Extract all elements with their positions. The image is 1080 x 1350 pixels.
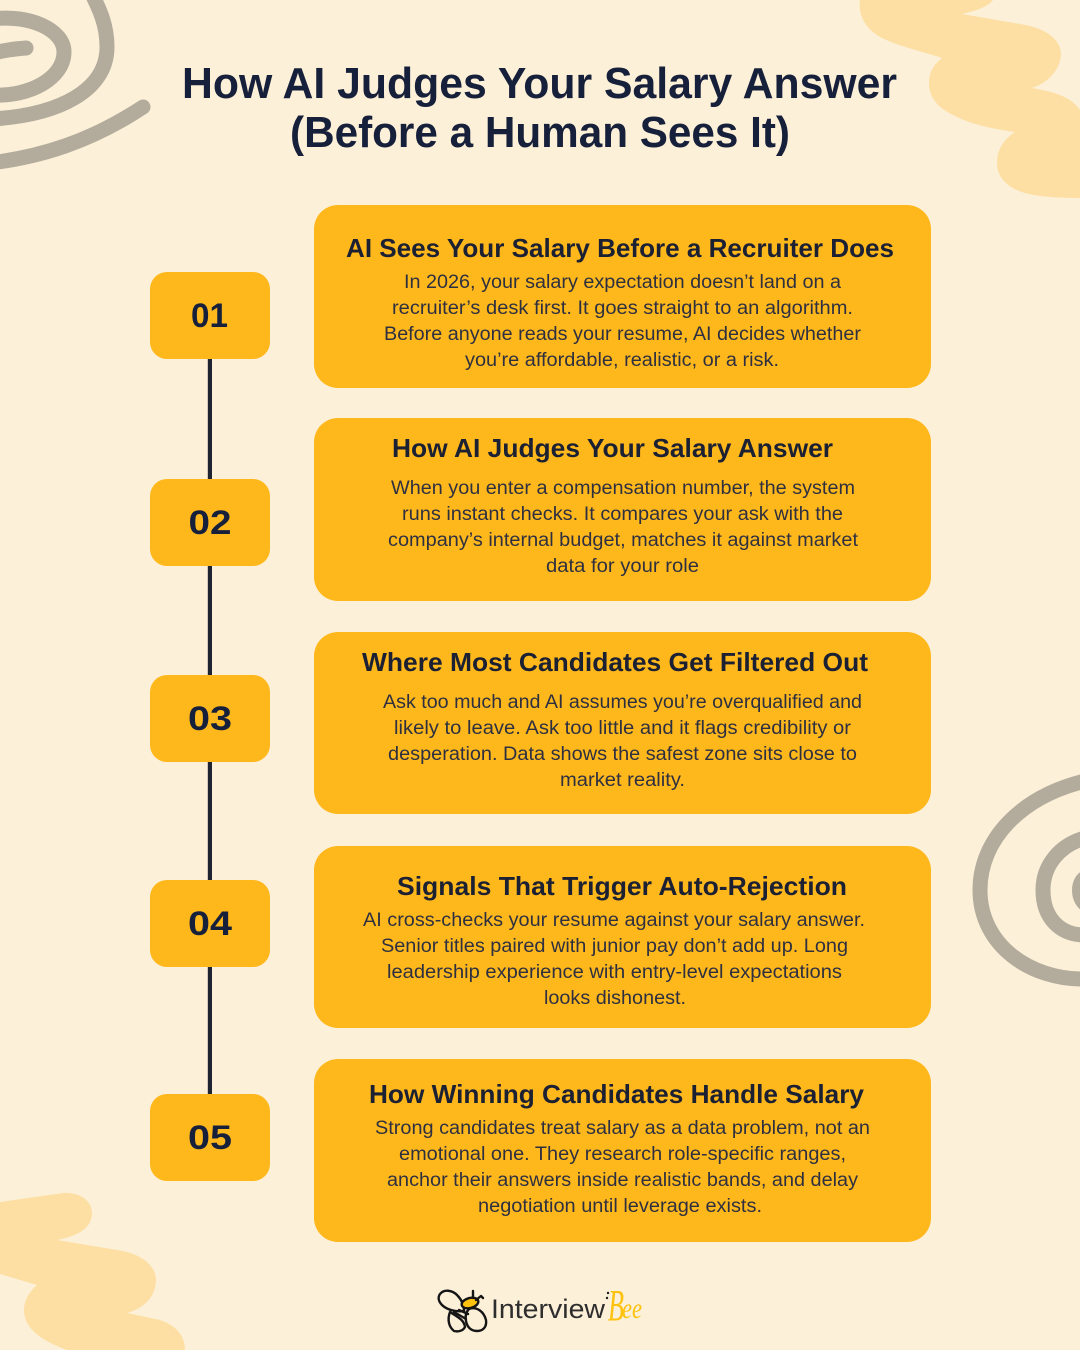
text block: card 1: you’re affordable, realistic, or a risk. [465,350,779,371]
heading: card 1: AI Sees Your Salary Before a Recruiter Does [346,233,894,263]
text block: card 2: When you enter a compensation number, the system [391,478,855,499]
text block: card 1: In 2026, your salary expectation doesn’t land on a [404,272,841,293]
text block: card 4: AI cross-checks your resume against your salary answer. [363,910,865,931]
text block: card 5 [375,1118,870,1217]
step badge 01 [150,272,270,359]
text block: card 2: data for your role [546,556,699,577]
text block: card 3: desperation. Data shows the safest zone sits close to [388,744,857,765]
text block: card 1: Before anyone reads your resume, AI decides whether [384,324,862,345]
wordmark: Interview [491,1294,606,1324]
text block: card 2 [388,478,859,577]
decoration: top-right blob [860,0,1080,198]
heading: card 5: How Winning Candidates Handle Salary [369,1079,865,1109]
title [182,59,897,157]
step badge 05: 05 [188,1119,232,1157]
text block: card 2: company’s internal budget, matches it against market [388,530,859,551]
icon: bee [439,1291,486,1331]
text block: card 1 [384,272,862,371]
text block: card 2: runs instant checks. It compares your ask with the [402,504,843,525]
step badge 02: 02 [188,504,232,542]
decoration: top-left swirl [0,0,143,163]
text block: card 4: Senior titles paired with junior pay don’t add up. Long [381,936,848,957]
text block: card 3: market reality. [560,770,685,791]
heading: card 2: How AI Judges Your Salary Answer [392,433,833,463]
title: How AI Judges Your Salary Answer [182,59,897,108]
panel: card 1 [314,205,931,388]
wordmark script: ee [622,1292,642,1325]
decoration: bottom-left blob [0,1193,185,1350]
step badge 04 [150,880,270,967]
step badge 05 [150,1094,270,1181]
text block: card 3 [383,692,862,791]
step badge 02 [150,479,270,566]
panel: card 4 [314,846,931,1028]
text block: card 4: leadership experience with entry-level expectations [387,962,842,983]
text block: card 4 [363,910,865,1009]
text block: card 5: Strong candidates treat salary as a data problem, not an [375,1118,870,1139]
panel: card 2 [314,418,931,601]
timeline connector [208,355,212,1100]
logo: InterviewBee [439,1281,642,1331]
text block: card 5: anchor their answers inside realistic bands, and delay [387,1170,859,1191]
step badge 04: 04 [188,905,232,943]
text block: card 4: looks dishonest. [544,988,686,1009]
wordmark script: B [608,1281,624,1330]
heading: card 3: Where Most Candidates Get Filtered Out [362,647,868,677]
text block: card 1: recruiter’s desk first. It goes straight to an algorithm. [392,298,853,319]
step badge 03 [150,675,270,762]
step badge 01: 01 [191,297,228,335]
heading: card 4: Signals That Trigger Auto-Rejection [397,871,847,901]
step badge 03: 03 [188,700,232,738]
text block: card 3: likely to leave. Ask too little and it flags credibility or [394,718,852,739]
title: (Before a Human Sees It) [290,108,790,157]
panel: card 5 [314,1059,931,1242]
text block: card 5: emotional one. They research role-specific ranges, [399,1144,846,1165]
text block: card 5: negotiation until leverage exists. [478,1196,762,1217]
text block: card 3: Ask too much and AI assumes you’re overqualified and [383,692,862,713]
wordmark dots [606,1292,609,1299]
decoration: right swirl [980,781,1080,979]
panel: card 3 [314,632,931,814]
